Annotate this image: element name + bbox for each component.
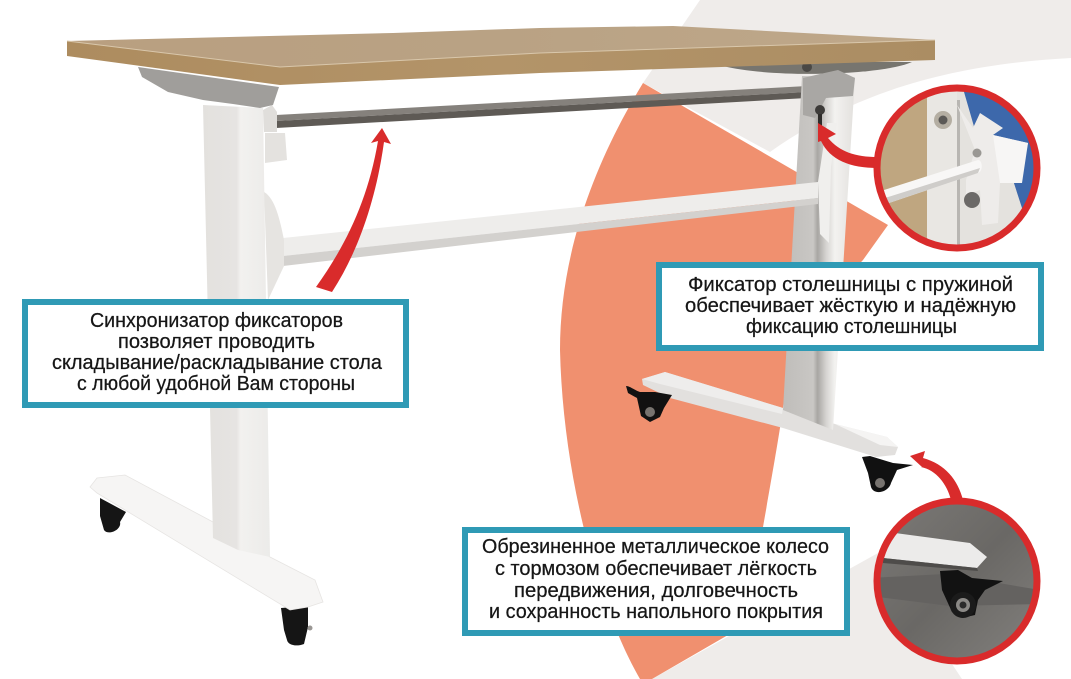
callout: synchronizer: с любой удобной Вам стороны: [77, 372, 355, 395]
background: orange sector: [560, 83, 888, 679]
front right caster: [862, 456, 913, 492]
callout: synchronizer: позволяет проводить: [118, 330, 315, 353]
callout: synchronizer: Синхронизатор фиксаторов: [90, 309, 343, 332]
callout: tabletop latch: [659, 265, 1041, 348]
left leg: [203, 105, 287, 557]
callout: tabletop latch: Фиксатор столешницы с пружиной: [688, 273, 1013, 296]
callout: wheel: и сохранность напольного покрытия: [489, 600, 823, 623]
desk: [67, 26, 935, 645]
background: grey shape top right: [643, 0, 1071, 152]
background shapes: [560, 0, 1071, 679]
latch plate on right leg: [818, 123, 837, 243]
callout: wheel: Обрезиненное металлическое колесо: [482, 535, 829, 558]
detail circle: wheel: [870, 495, 1045, 670]
detail circle: latch: [874, 84, 1040, 252]
callout: tabletop latch: обеспечивает жёсткую и надёжную: [685, 294, 1016, 317]
right leg hardware: [723, 62, 912, 138]
callout: wheel: [465, 530, 847, 633]
left foot casters: [100, 498, 312, 645]
background: grey shape bottom right: [652, 553, 962, 679]
tabletop: [67, 26, 935, 85]
arrow: to latch: [818, 123, 878, 168]
callout: tabletop latch: фиксацию столешницы: [746, 315, 957, 338]
left foot: [90, 475, 323, 610]
right leg: [723, 62, 912, 430]
callout: wheel: передвижения, долговечность: [514, 579, 798, 602]
arrow: to back rod: [316, 128, 391, 292]
back rod synchronizer: [276, 85, 825, 128]
callout: synchronizer: [25, 302, 406, 405]
back left caster: [626, 386, 672, 422]
right foot: [642, 372, 898, 457]
callout: synchronizer: складывание/раскладывание стола: [52, 351, 383, 374]
arrow: to brake: [910, 451, 963, 500]
white cross bar: [283, 182, 818, 266]
left latch blocks: [263, 105, 277, 132]
left bracket under tabletop: [138, 67, 279, 108]
callout: wheel: с тормозом обеспечивает лёгкость: [495, 557, 817, 580]
